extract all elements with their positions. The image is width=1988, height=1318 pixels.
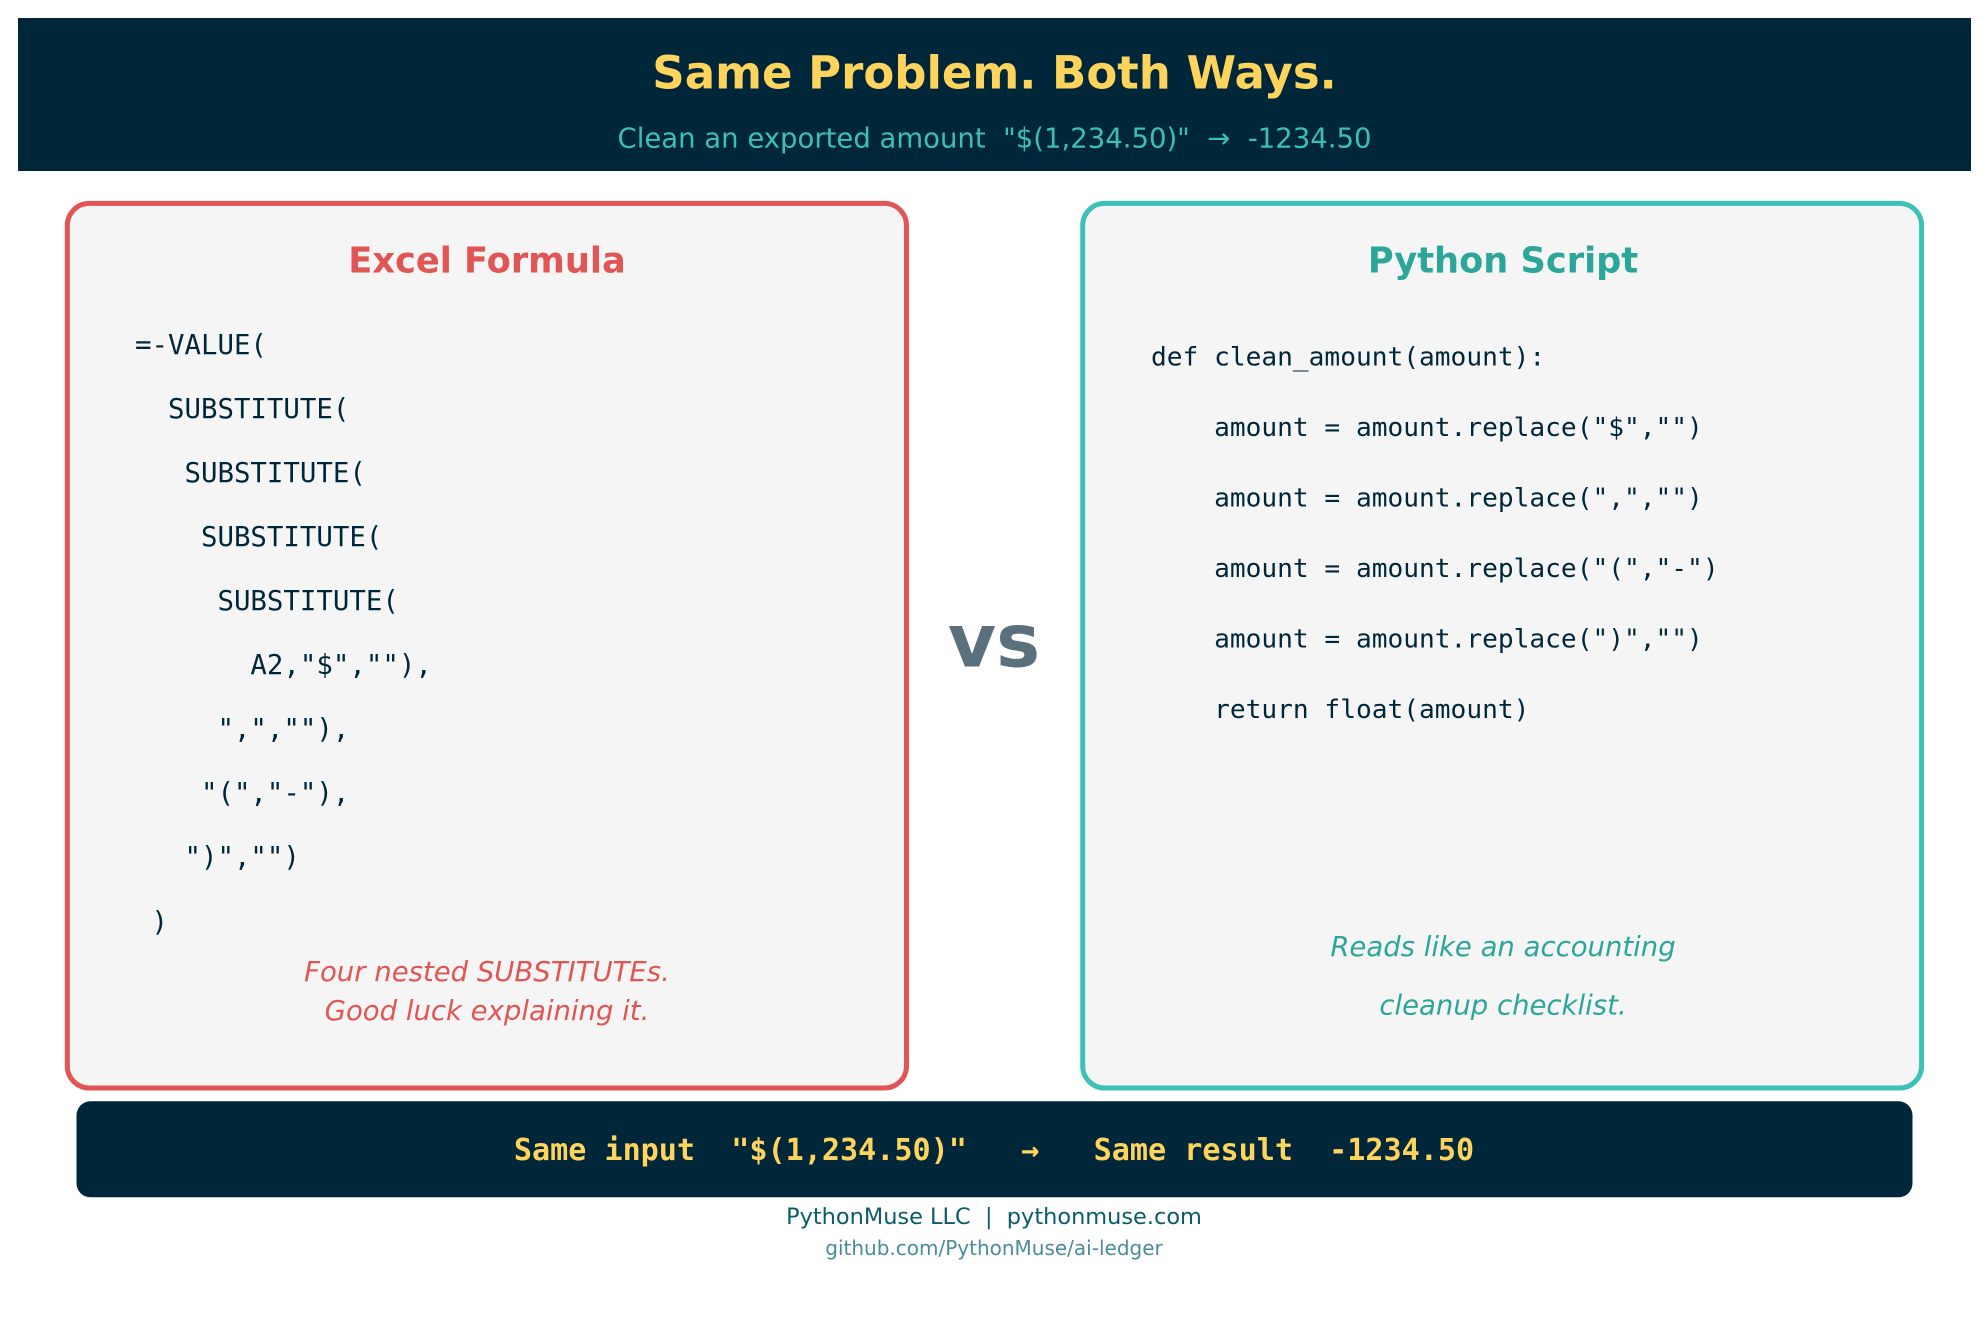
- caption: Python: Reads like an accounting: [1330, 931, 1676, 963]
- code block: nested formula: SUBSTITUTE(: [135, 458, 366, 489]
- code block: python function: return float(amount): [1151, 695, 1529, 725]
- code block: nested formula: SUBSTITUTE(: [135, 394, 349, 425]
- code block: nested formula: A2,"$",""),: [135, 650, 432, 681]
- title: Same Problem. Both Ways.: [652, 47, 1337, 100]
- code block: nested formula: SUBSTITUTE(: [135, 522, 382, 553]
- code block: nested formula: ",",""),: [135, 714, 349, 745]
- result text: Same input "$(1,234.50)" → Same result -1234.50: [514, 1133, 1474, 1168]
- panel: Python script: [1083, 203, 1922, 1088]
- code block: python function: def clean_amount(amount):: [1151, 342, 1545, 372]
- panel: Excel formula: [67, 203, 907, 1088]
- caption: Python: [1330, 931, 1676, 1022]
- code block: nested formula: [135, 330, 432, 938]
- code block: nested formula: =-VALUE(: [135, 330, 267, 361]
- header banner: [18, 18, 1971, 171]
- footer: company: PythonMuse LLC | pythonmuse.com: [786, 1204, 1202, 1230]
- code block: python function: amount = amount.replace(")",""): [1151, 624, 1703, 654]
- code block: python function: amount = amount.replace("(","-"): [1151, 554, 1719, 584]
- code block: nested formula: ")",""): [135, 842, 300, 873]
- code block: nested formula: ): [135, 907, 168, 938]
- code block: nested formula: "(","-"),: [135, 778, 349, 809]
- code block: nested formula: SUBSTITUTE(: [135, 586, 399, 617]
- panel heading: Python Script: Python Script: [1368, 241, 1638, 282]
- footer: repository: github.com/PythonMuse/ai-ledger: [825, 1236, 1164, 1260]
- code block: python function: amount = amount.replace(",",""): [1151, 484, 1703, 514]
- VS label: vs: [948, 598, 1040, 684]
- caption: Excel: Good luck explaining it.: [325, 995, 649, 1027]
- caption: Python: cleanup checklist.: [1379, 990, 1627, 1022]
- result bar: [76, 1101, 1912, 1197]
- subtitle: Clean an exported amount "$(1,234.50)" → -1234.50: [618, 122, 1371, 154]
- code block: python function: amount = amount.replace("$",""): [1151, 413, 1703, 443]
- footer: [786, 1204, 1202, 1260]
- code block: python function: [1151, 342, 1719, 725]
- panel heading: Excel Formula: Excel Formula: [348, 241, 626, 282]
- caption: Excel: Four nested SUBSTITUTEs.: [304, 956, 670, 988]
- caption: Excel: [304, 956, 670, 1027]
